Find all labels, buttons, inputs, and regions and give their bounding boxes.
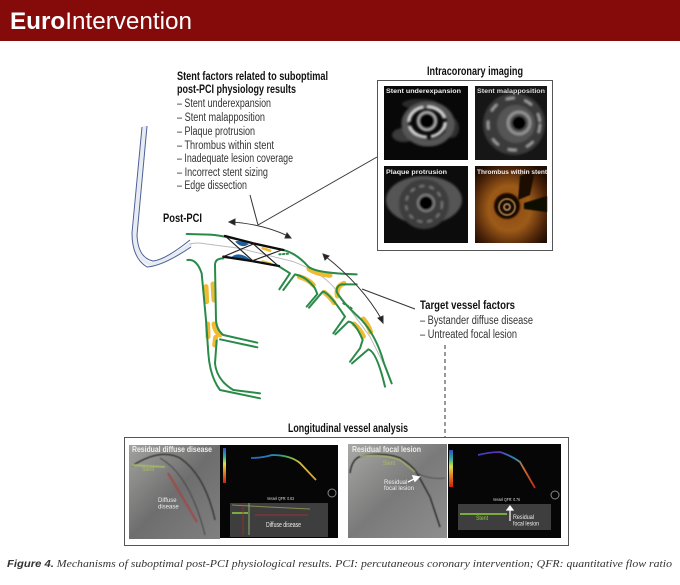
caption: Figure 4. Mechanisms of suboptimal post-PCI physiological results. PCI: percutaneous coronary intervention; QFR: quantitative flow ratio — [7, 559, 672, 570]
arrow: focal step — [507, 506, 513, 521]
journal logo: EuroIntervention — [10, 8, 192, 35]
stent with dissection — [223, 236, 283, 266]
image: stent underexpansion — [384, 86, 468, 160]
image: plaque protrusion: Plaque protrusion — [386, 169, 447, 176]
arrow: focal lesion — [408, 476, 419, 482]
QFR chart: focal lesion: Vessel QFR: 0.76 — [493, 497, 520, 502]
QFR chart: focal lesion: Stent — [476, 515, 488, 522]
arrow: stent region arc — [229, 157, 377, 238]
text block: stent factors: – Edge dissection — [177, 180, 247, 192]
dashed connector — [444, 345, 446, 437]
pointer from stent factors — [250, 195, 258, 225]
arrow: target vessel arc — [323, 254, 415, 323]
angiogram: residual focal lesion: focal lesion — [384, 486, 414, 492]
QFR chart: focal lesion: focal lesion — [513, 520, 539, 528]
panel: longitudinal vessel analysis — [124, 438, 568, 546]
text block: stent factors: – Stent malapposition — [177, 112, 265, 124]
panel: intracoronary imaging — [378, 80, 552, 250]
text block: stent factors: post-PCI physiology results — [177, 84, 296, 96]
text block: target vessel factors: – Untreated focal lesion — [420, 329, 517, 341]
text block: target vessel factors — [420, 300, 533, 341]
pointer to imaging panel — [258, 157, 377, 225]
heading: longitudinal vessel analysis: Longitudinal vessel analysis — [288, 423, 408, 435]
angiogram: residual diffuse disease — [129, 445, 220, 539]
text block: stent factors: – Plaque protrusion — [177, 126, 255, 138]
text block: target vessel factors: – Bystander diffuse disease — [420, 315, 533, 327]
header bar — [0, 0, 680, 41]
image: stent malapposition — [475, 86, 547, 160]
angiogram: residual focal lesion: Residual focal lesion — [352, 445, 421, 454]
angiogram: residual diffuse disease: Stent — [142, 467, 154, 473]
text block: stent factors: – Stent underexpansion — [177, 98, 271, 110]
text block: stent factors — [177, 71, 328, 192]
angiogram: residual focal lesion: Stent — [383, 461, 395, 467]
heading: post-PCI: Post-PCI — [163, 213, 202, 225]
pointer to target vessel factors — [362, 289, 415, 309]
coronary vessel tree — [187, 234, 392, 398]
text block: stent factors: – Inadequate lesion coverage — [177, 153, 293, 165]
image: stent malapposition: Stent malapposition — [477, 88, 545, 95]
QFR chart: diffuse disease — [220, 445, 338, 538]
guide catheter — [132, 126, 191, 267]
image: thrombus within stent — [475, 166, 548, 243]
QFR chart: diffuse disease: Diffuse disease — [266, 522, 301, 529]
angiogram: residual diffuse disease: Residual diffuse disease — [132, 445, 212, 454]
text block: stent factors: – Incorrect stent sizing — [177, 167, 268, 179]
lesions: yellow plaque — [206, 248, 371, 345]
angiogram: residual focal lesion: Residual — [384, 480, 407, 486]
centre line — [190, 243, 383, 363]
image: thrombus within stent: Thrombus within stent — [477, 169, 548, 176]
angiogram: residual diffuse disease: disease — [158, 504, 179, 510]
text block: stent factors: – Thrombus within stent — [177, 140, 275, 152]
QFR chart: diffuse disease: Vessel QFR: 0.83 — [267, 496, 294, 501]
text block: stent factors: Stent factors related to suboptimal — [177, 71, 328, 83]
vessel walls — [187, 234, 392, 398]
QFR chart: focal lesion — [448, 444, 561, 538]
heading: intracoronary imaging: Intracoronary imaging — [427, 66, 523, 78]
text block: target vessel factors: Target vessel factors — [420, 300, 515, 312]
image: stent underexpansion: Stent underexpansion — [386, 88, 461, 95]
QFR chart: focal lesion: Residual — [513, 514, 534, 521]
image: plaque protrusion — [384, 166, 468, 243]
angiogram: residual focal lesion — [348, 444, 447, 538]
angiogram: residual diffuse disease: Diffuse — [158, 498, 177, 504]
